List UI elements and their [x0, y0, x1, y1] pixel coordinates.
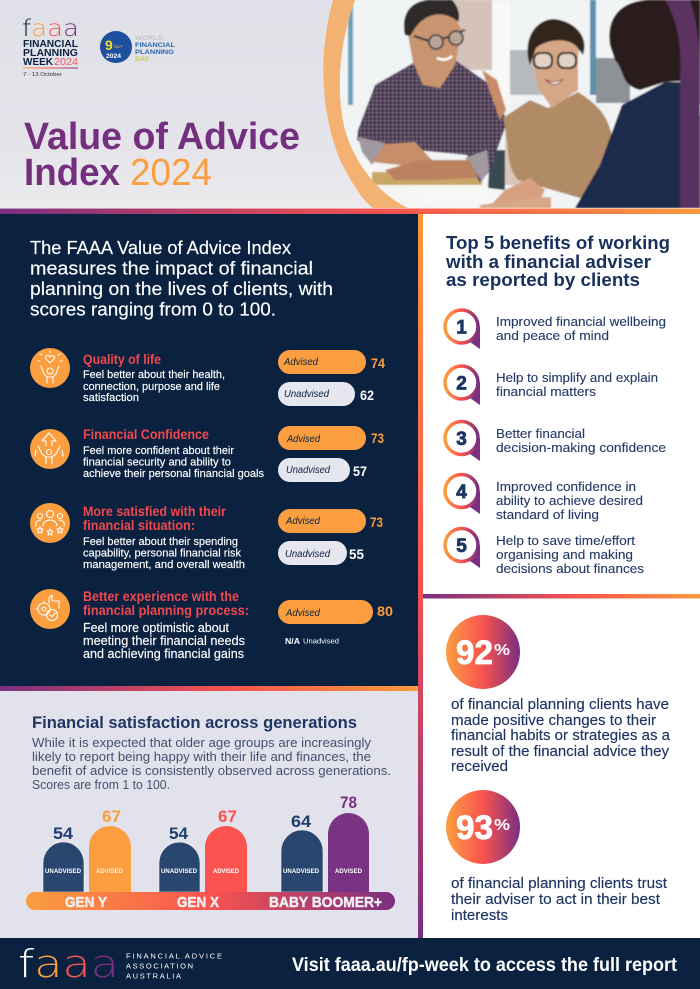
row: financial confidence	[30, 426, 384, 482]
benefit 2: 2	[456, 374, 467, 394]
benefit 5	[445, 528, 645, 576]
bars: financial confidence: 73	[371, 430, 384, 446]
text: financial confidence: Financial Confidence	[83, 427, 209, 442]
text: quality of life: connection, purpose and life	[83, 381, 220, 393]
icon: gear and thumbs up	[30, 589, 70, 629]
benefit 2: financial matters	[496, 384, 597, 399]
FP Week logo: FINANCIAL	[23, 39, 78, 50]
photo: adviser meeting with clients	[335, 0, 700, 208]
panel: financial satisfaction across generations	[0, 691, 418, 938]
panel: value of advice index	[0, 214, 418, 686]
bars: better experience: Advised	[285, 608, 320, 619]
benefit 5: 5	[456, 536, 467, 557]
bars: baby boomer	[281, 793, 369, 892]
row: better experience	[30, 589, 393, 661]
bars: quality of life: 62	[360, 387, 374, 403]
header banner	[0, 0, 700, 208]
bars: quality of life	[278, 350, 385, 406]
stat: 93 percent	[446, 790, 667, 924]
vertical gradient divider	[418, 214, 423, 938]
FAAA logo: AUSTRALIA	[126, 972, 181, 980]
benefit 4: Improved confidence in	[496, 479, 636, 494]
stat: 92 percent: result of the financial advice they	[451, 744, 670, 760]
orange arc	[323, 0, 408, 208]
stat: 92 percent: financial habits or strategies as a	[451, 728, 671, 744]
chart: generations bar chart	[26, 793, 395, 911]
heading: with a financial adviser	[445, 252, 651, 272]
benefit 1: Improved financial wellbeing	[496, 314, 666, 329]
icon: arrow and figure	[30, 429, 70, 469]
bars: gen x: ADVISED	[213, 869, 240, 875]
bars: better experience	[278, 600, 393, 646]
heading: Top 5 benefits of working	[446, 233, 670, 253]
row: more satisfied with financial situation	[30, 503, 383, 571]
bars: gen x	[159, 807, 247, 892]
bars: gen x: 67	[218, 807, 237, 826]
stat: 92 percent: of financial planning clients have	[451, 697, 669, 713]
description	[32, 735, 391, 792]
stat: 93 percent: %	[494, 817, 510, 834]
man's arms and hands	[372, 141, 432, 166]
bars: gen y: ADVISED	[96, 869, 124, 875]
heading: Financial satisfaction across generations	[32, 713, 357, 732]
intro text	[30, 238, 333, 320]
text: financial confidence: achieve their personal financial goals	[83, 468, 264, 480]
FAAA logo: FINANCIAL ADVICE	[126, 952, 222, 960]
gradient band under header	[0, 208, 700, 214]
World Financial Planning Day logo: OCT	[114, 44, 123, 49]
bars: financial confidence: Advised	[286, 434, 320, 445]
generation axis band	[26, 892, 395, 911]
intro text: measures the impact of financial	[30, 258, 313, 278]
icon: heart and raised hands	[30, 348, 70, 388]
benefit 3: 3	[456, 429, 467, 450]
description: While it is expected that older age groups are increasingly	[32, 735, 372, 750]
generation axis band: GEN X	[177, 894, 219, 911]
stat: 92 percent	[446, 615, 671, 775]
FP Week logo	[22, 16, 79, 78]
title: Index	[24, 152, 120, 194]
bars: quality of life: 74	[371, 355, 385, 371]
World Financial Planning Day logo: DAY	[135, 56, 150, 63]
woman's head	[532, 35, 580, 108]
World Financial Planning Day logo: FINANCIAL	[135, 42, 175, 49]
text: quality of life	[83, 352, 225, 404]
panel: top 5 benefits	[423, 214, 700, 594]
bars: baby boomer: 64	[291, 812, 312, 831]
benefit 4: standard of living	[496, 507, 599, 522]
text: more satisfied	[83, 504, 245, 571]
panel: key statistics	[446, 615, 671, 924]
title	[24, 116, 300, 194]
bars: more satisfied: Unadvised	[285, 549, 330, 560]
text: better experience: Better experience with the	[83, 589, 239, 604]
FAAA logo: ASSOCIATION	[126, 962, 193, 970]
bars: quality of life: Advised	[283, 357, 318, 368]
World Financial Planning Day logo: WORLD	[135, 35, 163, 42]
benefit 1: 1	[456, 318, 467, 338]
footer	[0, 938, 700, 989]
bars: gen x: UNADVISED	[161, 869, 198, 875]
bars: gen x: 54	[169, 824, 189, 843]
bars: baby boomer: ADVISED	[335, 869, 363, 875]
benefit 2: Help to simplify and explain	[496, 370, 658, 385]
text: financial confidence	[83, 427, 264, 480]
FP Week logo: 7 - 13 October	[23, 72, 62, 78]
stat: 92 percent: made positive changes to their	[451, 713, 656, 729]
benefit 3: decision-making confidence	[496, 440, 666, 455]
description: Scores are from 1 to 100.	[32, 777, 170, 792]
FP Week logo: faaa	[22, 16, 79, 42]
text: quality of life: satisfaction	[83, 392, 139, 404]
man's head	[408, 8, 462, 88]
stat: 92 percent: received	[451, 759, 508, 775]
benefit 5: decisions about finances	[496, 561, 645, 576]
stat: 93 percent: their adviser to act in their best	[451, 892, 660, 908]
stat: 93 percent: 93	[456, 809, 493, 847]
bars: more satisfied: Advised	[285, 516, 320, 527]
text: quality of life: Quality of life	[83, 352, 161, 367]
text: more satisfied: management, and overall wealth	[83, 559, 245, 571]
text: more satisfied: financial situation:	[83, 518, 195, 533]
third person	[574, 80, 682, 208]
benefit 4: ability to achieve desired	[496, 493, 643, 508]
FP Week logo: WEEK	[23, 57, 54, 68]
title: Value of Advice	[24, 116, 300, 158]
man's shirt	[357, 60, 507, 183]
FP Week logo: PLANNING	[23, 48, 78, 59]
bars: more satisfied: 73	[370, 514, 383, 530]
bars: better experience: Unadvised	[303, 638, 339, 646]
benefit 4: 4	[456, 482, 467, 503]
text: better experience: financial planning process:	[83, 603, 249, 618]
text: financial confidence: Feel more confident about their	[83, 445, 234, 457]
bars: gen y: 67	[102, 807, 121, 826]
text: financial confidence: financial security and ability to	[83, 456, 231, 468]
bars: financial confidence: Unadvised	[286, 465, 330, 476]
icon: people and stars	[30, 503, 70, 543]
bars: gen y: UNADVISED	[45, 869, 82, 875]
stat: 93 percent: of financial planning clients trust	[451, 876, 667, 892]
text: more satisfied: More satisfied with their	[83, 504, 227, 519]
text: better experience	[83, 589, 249, 661]
benefit 5: organising and making	[496, 547, 633, 562]
bars: gen y: 54	[53, 824, 74, 843]
bars: baby boomer: 78	[340, 793, 357, 812]
intro text: planning on the lives of clients, with	[30, 279, 333, 299]
bars: gen y	[43, 807, 131, 892]
call to action: Visit faaa.au/fp-week to access the full report	[292, 955, 678, 976]
stat: 93 percent: interests	[451, 908, 508, 924]
bars: quality of life: Unadvised	[284, 389, 329, 400]
heading	[445, 233, 670, 290]
gradient band in right column	[423, 594, 700, 598]
generation axis band: BABY BOOMER+	[269, 894, 382, 911]
text: more satisfied: capability, personal financial risk	[83, 548, 241, 560]
woman's body	[503, 92, 612, 198]
benefit 4	[445, 474, 643, 522]
bars: better experience: N/A	[285, 636, 300, 646]
text: more satisfied: Feel better about their spending	[83, 536, 238, 548]
World Financial Planning Day logo: 2024	[106, 54, 122, 60]
bars: more satisfied	[278, 509, 383, 565]
FP Week logo: 2024	[54, 57, 78, 68]
description: benefit of advice is consistently observed across generations.	[32, 763, 391, 778]
World Financial Planning Day logo	[100, 31, 175, 63]
gradient band above generations panel	[0, 686, 418, 691]
benefit 5: Help to save time/effort	[496, 533, 635, 548]
generation axis band: GEN Y	[65, 894, 107, 911]
intro text: The FAAA Value of Advice Index	[30, 238, 291, 258]
benefit 1	[445, 310, 666, 349]
text: better experience: meeting their financial needs	[83, 634, 245, 648]
benefit 2	[445, 366, 658, 405]
World Financial Planning Day logo: 9	[105, 37, 113, 53]
benefit 1: and peace of mind	[496, 328, 609, 343]
FAAA logo	[18, 942, 222, 986]
text: better experience: Feel more optimistic about	[83, 621, 230, 635]
title: 2024	[130, 152, 212, 194]
FAAA logo: faaa	[18, 942, 119, 986]
bars: financial confidence: 57	[353, 463, 367, 479]
description: likely to report being happy with their life and finances, the	[32, 749, 371, 764]
bars: better experience: 80	[377, 603, 393, 619]
stat: 92 percent: 92	[456, 634, 493, 672]
text: quality of life: Feel better about their health,	[83, 369, 225, 381]
bars: more satisfied: 55	[349, 546, 364, 562]
bars: baby boomer: UNADVISED	[283, 869, 320, 875]
heading: as reported by clients	[446, 270, 640, 290]
benefit 3: Better financial	[496, 426, 585, 441]
stat: 92 percent: %	[494, 642, 510, 659]
bars: financial confidence	[278, 426, 384, 482]
text: better experience: and achieving financial gains	[83, 647, 244, 661]
benefit 3	[445, 422, 666, 461]
intro text: scores ranging from 0 to 100.	[30, 300, 276, 320]
World Financial Planning Day logo: PLANNING	[135, 49, 174, 56]
row: quality of life	[30, 348, 385, 406]
